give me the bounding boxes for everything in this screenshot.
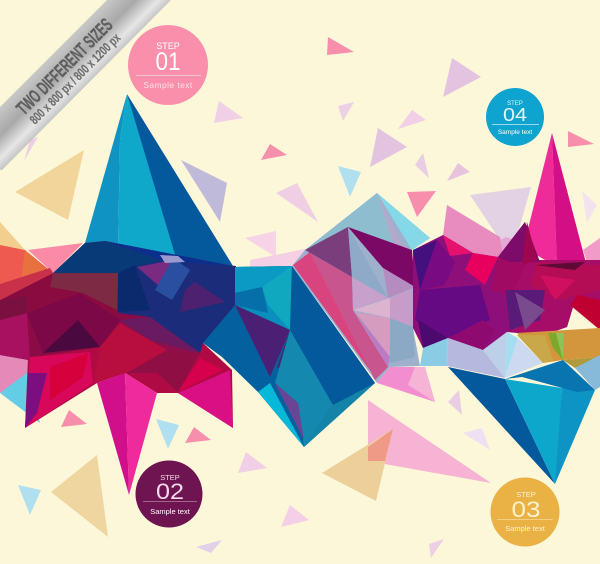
step 02 badge: STEP xyxy=(160,473,180,482)
pale facets behind right band xyxy=(443,205,600,265)
step 04 badge xyxy=(486,88,544,146)
left band xyxy=(0,241,235,373)
cyan and blue lower left fragments xyxy=(0,345,40,423)
right blue peak xyxy=(448,355,600,484)
step 03 badge: STEP xyxy=(516,490,536,499)
step 01 badge: 01 xyxy=(156,48,180,76)
centre blue diamond xyxy=(203,266,375,447)
step 02 badge: 02 xyxy=(156,479,184,504)
step 01 badge xyxy=(128,25,208,105)
centre navy block xyxy=(53,241,236,353)
step 01 badge: STEP xyxy=(156,41,180,51)
step 04 badge: 04 xyxy=(503,105,527,125)
step 04 badge: Sample text xyxy=(498,129,532,136)
step 04 badge: STEP xyxy=(507,101,523,107)
step 02 badge xyxy=(136,460,202,528)
pale panels under right band xyxy=(420,328,600,378)
step 03 badge xyxy=(490,478,560,546)
right magenta spike xyxy=(524,133,586,267)
step 01 badge: Sample text xyxy=(143,80,193,90)
right band xyxy=(413,222,600,350)
bottom magenta spikes xyxy=(97,358,233,495)
lower crimson band xyxy=(25,317,233,428)
step 03 badge: 03 xyxy=(512,497,540,522)
grey-blue central peak xyxy=(292,193,435,402)
step 03 badge: Sample text xyxy=(505,524,546,533)
step 02 badge: Sample text xyxy=(150,507,191,516)
ribbon: two different sizes xyxy=(0,0,171,170)
left blue peak xyxy=(85,94,233,266)
